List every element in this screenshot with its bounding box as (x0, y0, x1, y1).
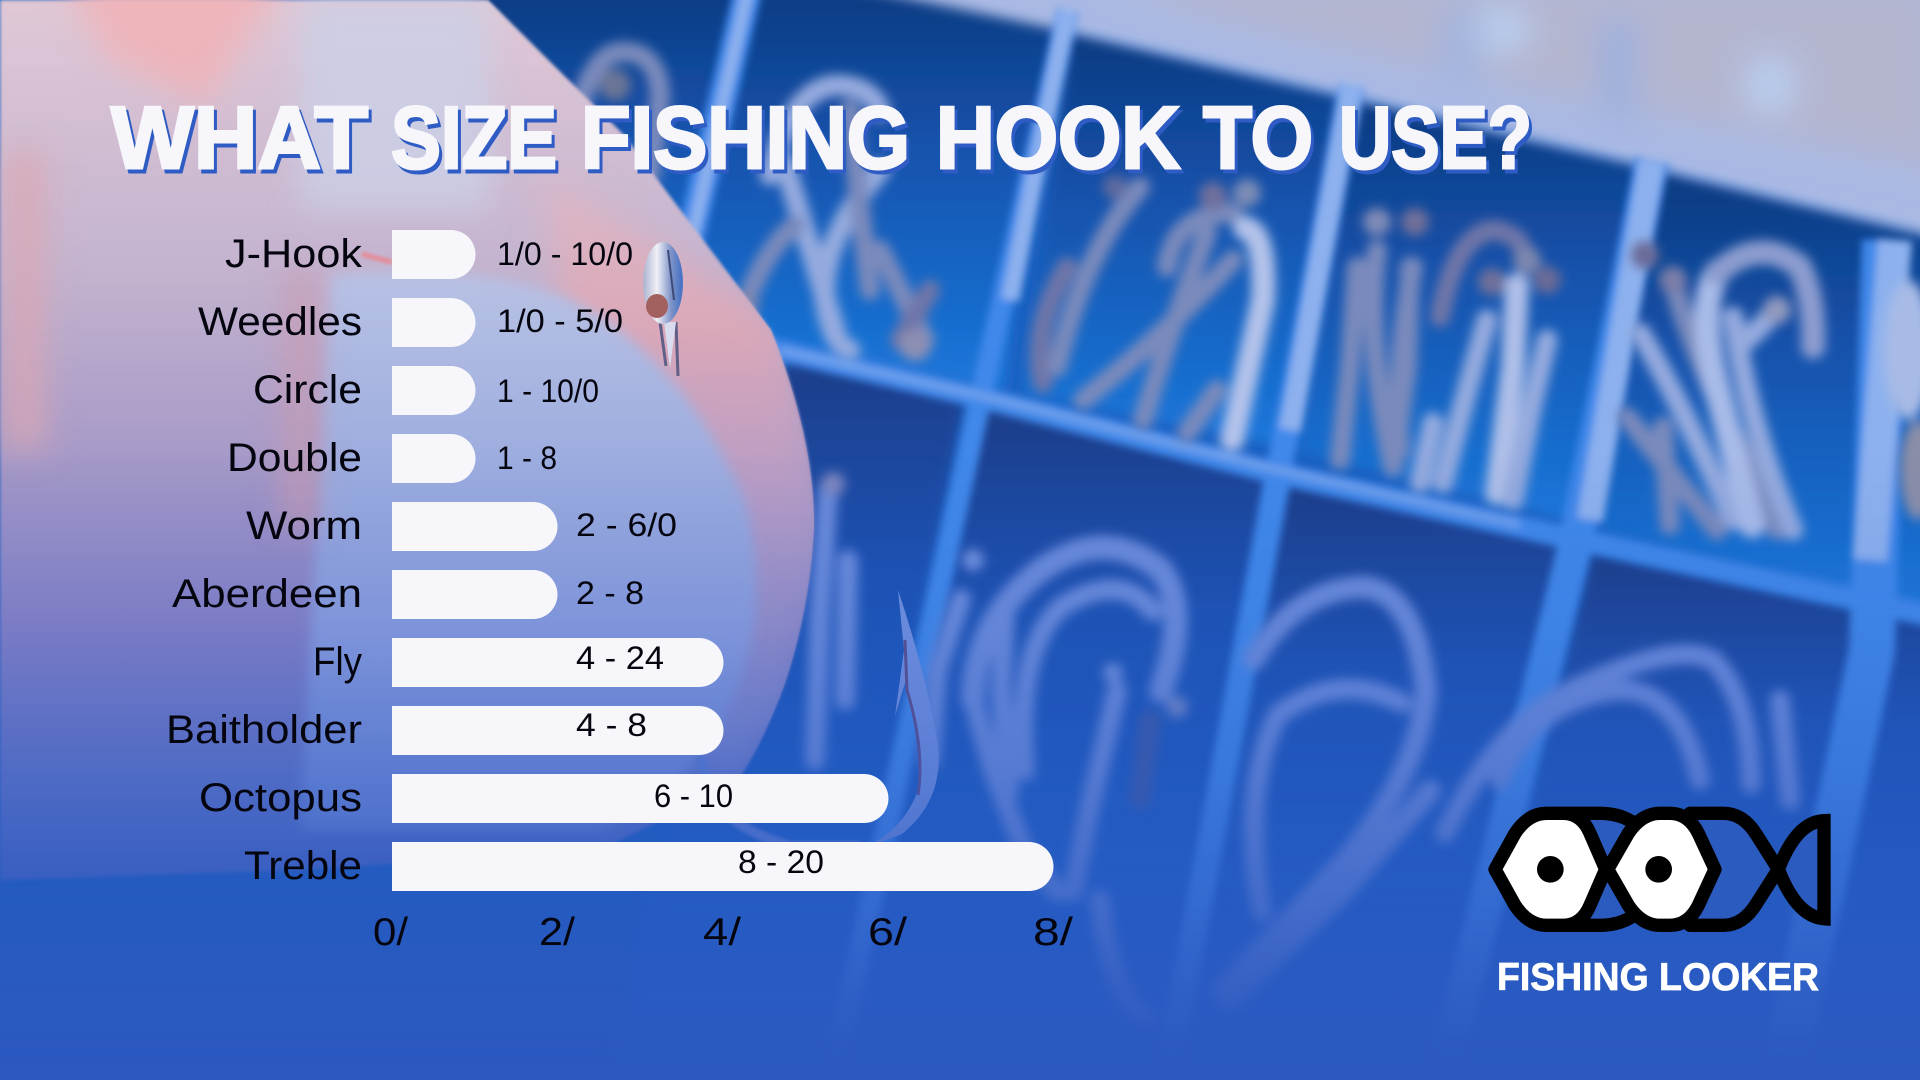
x axis labels: 2/ (539, 911, 575, 954)
title: FISHING (581, 88, 910, 187)
x axis labels (373, 911, 1073, 954)
title: TO (1203, 88, 1313, 187)
foreground hook point (700, 590, 939, 846)
small hook eye in the fingertip (643, 242, 683, 376)
x axis labels: 0/ (373, 911, 408, 954)
row: Aberdeen: 2 - 8 (576, 575, 644, 611)
row: Baitholder (166, 706, 724, 755)
row: J-Hook: J-Hook (225, 232, 363, 276)
x axis labels: 4/ (703, 911, 741, 954)
icon: fish with two eyes (1495, 813, 1824, 925)
title: HOOK (936, 88, 1180, 187)
box dividers (665, 0, 1920, 1080)
row: Baitholder: Baitholder (166, 708, 362, 752)
row: Circle: 1 - 10/0 (497, 373, 599, 409)
row: Baitholder: 4 - 8 (576, 707, 647, 743)
pink rim of the fingertip (544, 190, 814, 774)
row: Aberdeen: Aberdeen (172, 572, 362, 616)
top frame of the box (820, 0, 1920, 238)
logo: Fishing Looker (1495, 813, 1824, 999)
x axis labels: 6/ (868, 911, 907, 954)
title: WHAT (111, 88, 368, 187)
row: Weedles (198, 298, 623, 347)
row: Circle (253, 366, 599, 415)
row: Worm: Worm (246, 504, 362, 548)
row: Weedles: Weedles (198, 300, 362, 344)
row: Double (227, 434, 557, 483)
blurred hooks in the box (575, 52, 1920, 1020)
row: Fly: Fly (313, 640, 362, 684)
row: Treble: Treble (244, 844, 362, 888)
row: Octopus (199, 774, 888, 823)
title: SIZE (391, 88, 557, 187)
row: Treble: 8 - 20 (738, 844, 824, 880)
row: Fly: 4 - 24 (576, 640, 664, 676)
row: J-Hook (225, 230, 633, 279)
row: Double: Double (227, 436, 362, 480)
row: Octopus: 6 - 10 (654, 778, 733, 814)
row: Worm (246, 502, 677, 551)
row: Circle: Circle (253, 368, 362, 412)
row: Octopus: Octopus (199, 776, 362, 820)
background photo: finger holding a hook (0, 0, 830, 880)
title (111, 88, 1532, 187)
row: Aberdeen (172, 570, 644, 619)
row: Treble (244, 842, 1054, 891)
row: Double: 1 - 8 (497, 440, 557, 476)
logo wordmark: FISHING LOOKER (1497, 956, 1819, 999)
row: J-Hook: 1/0 - 10/0 (497, 236, 633, 272)
row: Worm: 2 - 6/0 (576, 507, 677, 543)
title: USE? (1339, 88, 1532, 187)
row: Weedles: 1/0 - 5/0 (497, 303, 623, 339)
row: Fly (313, 638, 724, 687)
bar chart: hook size ranges (166, 230, 1073, 954)
x axis labels: 8/ (1033, 911, 1073, 954)
